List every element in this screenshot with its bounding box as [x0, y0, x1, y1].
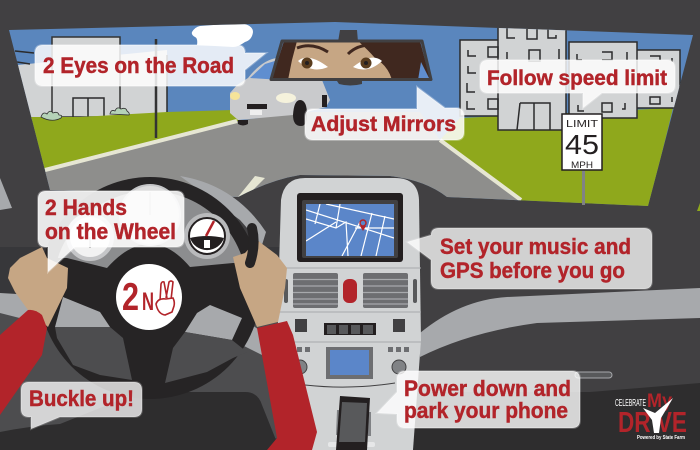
callout: Adjust Mirrors: Adjust Mirrors: [311, 113, 456, 136]
air vents: [284, 273, 417, 308]
dashboard lower area left: [0, 247, 285, 438]
map pin: [360, 220, 366, 231]
vent slot pill: [575, 372, 612, 378]
callout: Power down and park your phone: Power down and: [404, 376, 571, 401]
Celebrate My Drive logo: CELEBRATE: [615, 398, 646, 409]
cluster hood: [58, 194, 241, 268]
right hand: [233, 240, 287, 327]
speed limit sign: 45: [565, 129, 599, 160]
Celebrate My Drive logo: Powered by State Farm: [637, 435, 685, 441]
hazard button: [343, 279, 357, 303]
callout: Adjust Mirrors: [305, 87, 464, 140]
right lower spoke gap: [165, 332, 247, 383]
phone in holder: [328, 396, 375, 450]
left hand: [8, 247, 68, 327]
lower dark panel: [0, 383, 700, 450]
wheel rim over right hand: [250, 228, 254, 263]
callout: 2 Hands on the Wheel: 2 Hands: [45, 195, 127, 220]
callout: Power down and park your phone: park your phone: [404, 398, 568, 423]
callout: 2 Hands on the Wheel: [38, 191, 184, 272]
callout: Set your music and GPS: GPS before you go: [440, 258, 625, 283]
street pole: [155, 39, 157, 138]
wheel hub logo: 2: [122, 276, 139, 319]
speedometer: [120, 185, 180, 245]
grass: [28, 108, 673, 210]
navigation screen: [297, 193, 403, 262]
speed limit sign: MPH: [571, 160, 593, 170]
climate display: [326, 347, 373, 379]
wheel hub logo: N: [142, 288, 154, 316]
eyes: [297, 45, 382, 69]
Celebrate My Drive logo: My: [647, 391, 672, 412]
fuel gauge: [184, 213, 230, 259]
callout: Set your music and GPS: Set your music and: [440, 234, 631, 259]
bushes: [41, 108, 129, 120]
callout: Power down and park your phone: [377, 371, 580, 428]
callout: Buckle up: [21, 382, 142, 429]
road curbs: [45, 121, 521, 200]
control buttons: [295, 319, 409, 352]
left gauge: [68, 215, 112, 259]
left buildings: [15, 37, 167, 120]
wheel hub logo: [116, 264, 182, 330]
callout: Follow speed limit: Follow speed limit: [487, 67, 667, 90]
road centre dash: [238, 176, 265, 197]
knobs: [293, 360, 406, 374]
callout: Buckle up: Buckle up!: [29, 386, 134, 411]
callout: 2 Hands on the Wheel: on the Wheel: [45, 219, 176, 244]
callout: Follow speed limit: [480, 60, 675, 108]
cowl strip: [180, 176, 266, 245]
speed limit sign: [562, 114, 602, 205]
right buildings: [460, 20, 680, 130]
following car: [230, 58, 330, 126]
steering wheel: [44, 177, 256, 399]
center console: [278, 178, 421, 450]
rear-view mirror: [270, 30, 435, 86]
left lower spoke gap: [55, 327, 132, 380]
right upper spoke gap: [185, 305, 242, 340]
left upper spoke gap: [55, 297, 110, 327]
road: [45, 112, 523, 205]
windshield scene: [9, 22, 693, 206]
left sleeve: [0, 310, 47, 415]
Celebrate My Drive logo: [615, 391, 687, 441]
dashboard light band right: [420, 288, 700, 357]
right sleeve: [257, 321, 317, 450]
callout: 2 Eyes on the Road: [35, 45, 266, 86]
speed limit sign: LIMIT: [566, 119, 598, 130]
callout: 2 Eyes on the Road: 2 Eyes on the Road: [43, 53, 234, 78]
side windows: [0, 178, 700, 211]
cloud: [192, 23, 253, 47]
callout: Set your music and GPS: [407, 228, 652, 289]
